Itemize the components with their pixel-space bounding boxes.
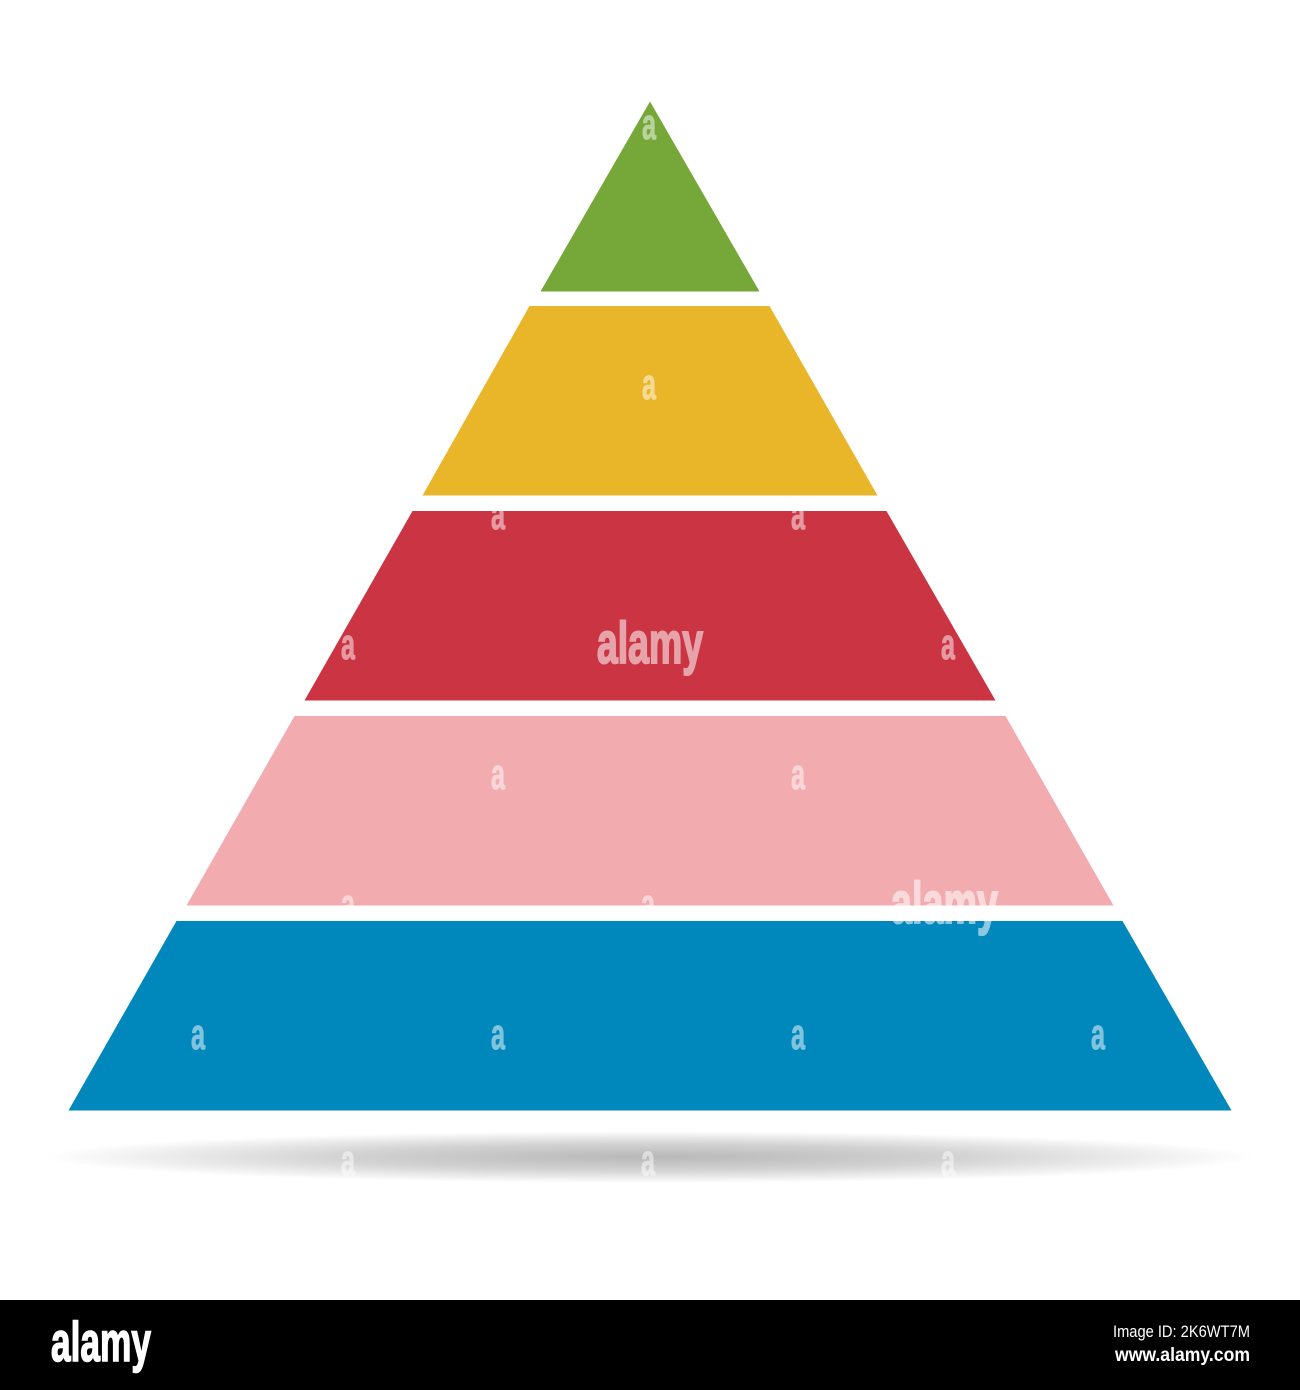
tier 2: yellow [422,306,878,496]
tier 5: blue base [68,921,1232,1110]
watermark across pink and blue tiers: alamy [891,871,998,936]
website url: www.alamy.com [1114,1345,1250,1366]
small watermark letters: a [191,1010,205,1059]
white gap above blue tier [880,906,1010,921]
footer bar [0,1300,1300,1390]
tier 3: red [304,511,996,700]
small watermark letters: a [941,620,955,669]
small watermark letters: a [1091,1010,1105,1059]
small watermark letters: a [791,750,805,799]
small watermark letters: a [341,880,355,929]
small watermark letters: a [491,490,505,539]
small watermark letters: a [641,1136,655,1185]
small watermark letters [191,100,1105,1185]
small watermark letters: a [341,1136,355,1185]
small watermark letters: a [791,490,805,539]
pyramid [68,102,1232,1110]
footer logo: alamy [51,1310,151,1373]
watermark on red tier: alamy [597,611,703,676]
small watermark letters: a [941,1136,955,1185]
small watermark letters: a [341,620,355,669]
image id: Image ID: 2K6WT7M [1113,1322,1250,1341]
small watermark letters: a [642,360,656,409]
small watermark letters: a [491,1010,505,1059]
small watermark letters: a [491,750,505,799]
small watermark letters: a [642,100,656,149]
ground shadow [45,1131,1255,1183]
tier 1: green apex [540,102,760,292]
small watermark letters: a [641,880,655,929]
tier 4: pink [186,716,1114,906]
small watermark letters: a [791,1010,805,1059]
